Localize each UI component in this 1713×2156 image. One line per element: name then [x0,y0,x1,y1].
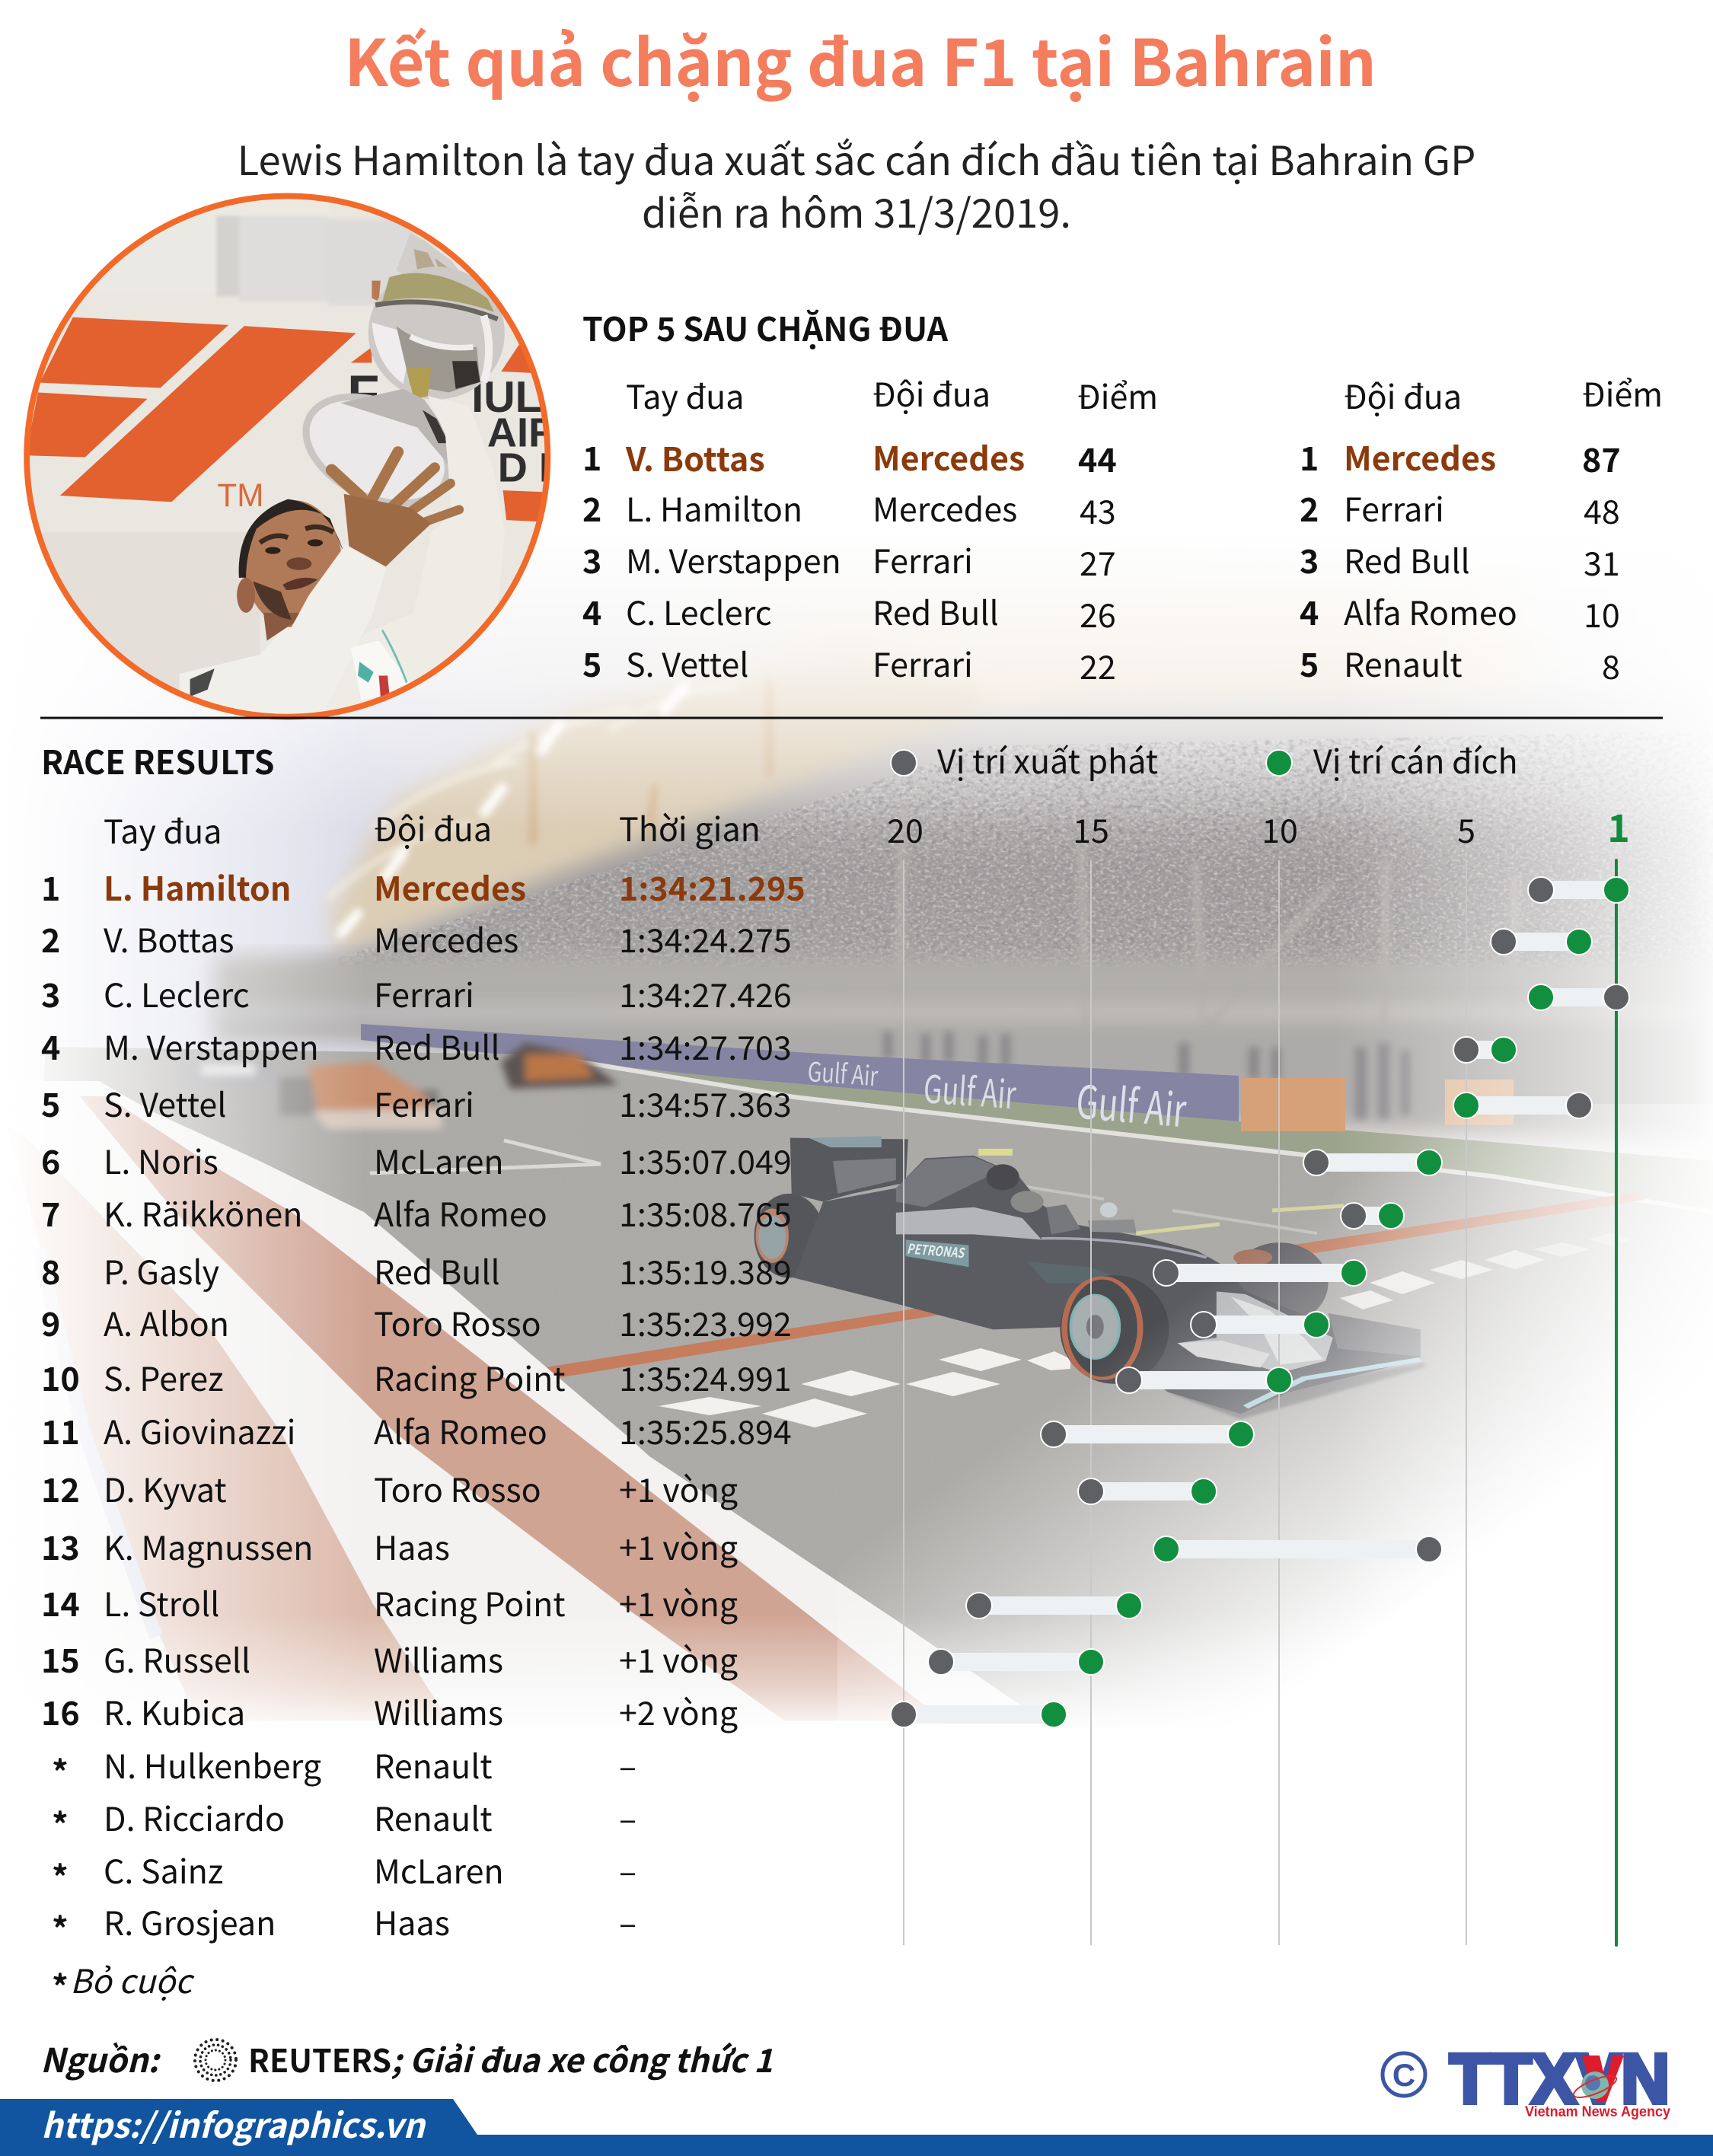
top 5 driver rows: Mercedes [872,433,1025,480]
row 6: McLaren [374,1137,504,1184]
row 2 [41,915,792,962]
S. Vettel 2 to 5 [1453,1092,1592,1118]
top 5 team rows: Ferrari [1344,484,1444,531]
L. Hamilton 3 to 1 [1528,877,1629,903]
table header: teams: Đội đua [1344,372,1462,419]
retired: Sainz: C. Sainz [104,1846,223,1893]
A. Albon 12 to 9 [1191,1312,1329,1338]
row 11: 1:35:25.894 [619,1407,792,1454]
subtitle: Lewis Hamilton là tay đua xuất sắc cán đích đầu tiên tại Bahrain GP [238,129,1475,187]
photo: Lewis Hamilton with trophy: AIR [487,410,558,456]
row 2: 2 [41,915,60,962]
row 12: D. Kyvat [104,1465,227,1512]
row 3: Ferrari [374,970,474,1017]
trophy [289,234,505,525]
row 7: Alfa Romeo [374,1189,547,1236]
row 3: 3 [41,970,60,1017]
row 4: M. Verstappen [104,1022,319,1070]
row 13 [41,1523,738,1570]
retired: Hulkenberg: Renault [374,1741,493,1788]
top 5 team rows: Red Bull [1344,536,1470,583]
title: Kết quả chặng đua F1 tại Bahrain [344,12,1376,105]
Gulf Air banner and grass: Gulf Air [806,1051,880,1095]
background photo: race track and grandstand [39,601,1713,1721]
row 15: 15 [41,1635,80,1682]
top 5 driver rows: M. Verstappen [626,536,841,583]
row 13: K. Magnussen [104,1523,313,1570]
row 16: Williams [374,1688,503,1735]
retired: Ricciardo [52,1794,636,1847]
row 4: 1:34:27.703 [619,1022,792,1070]
A. Giovinazzi 16 to 11 [1041,1421,1254,1447]
source line [40,2034,773,2082]
head [244,500,342,627]
row 15: +1 vòng [619,1635,738,1682]
chart axis: grid position scale: 5 [1457,805,1475,853]
table header: teams: Điểm [1582,369,1663,416]
section heading: race results: RACE RESULTS [41,737,275,784]
retired: Grosjean: – [619,1898,636,1945]
orange hoardings [1241,1078,1345,1131]
section heading: top 5: TOP 5 SAU CHẶNG ĐUA [582,304,948,351]
C. Leclerc 1 to 3 [1528,984,1629,1010]
row 14: 14 [41,1579,80,1626]
legend [891,736,1518,783]
top 5 driver rows: 5 [582,639,601,687]
row 5: 1:34:57.363 [619,1080,792,1127]
icon: globe [1571,2071,1619,2102]
table header: drivers: Tay đua [626,372,745,419]
row 13: 13 [41,1523,80,1570]
row 10: 1:35:24.991 [619,1354,792,1401]
source line: REUTERS [248,2036,391,2082]
retired: Sainz: – [619,1846,636,1893]
K. Räikkönen 8 to 7 [1341,1203,1404,1229]
row 7: 7 [41,1189,60,1236]
G. Russell 19 to 15 [928,1649,1104,1675]
retired: Sainz [52,1846,636,1899]
retired: Grosjean [52,1898,636,1951]
row 7: 1:35:08.765 [619,1189,792,1236]
row 9: A. Albon [104,1299,229,1346]
top 5 driver rows: 27 [1080,538,1116,585]
row 7 [41,1189,792,1236]
row 14: +1 vòng [619,1579,738,1626]
retired: Ricciardo: * [52,1800,69,1847]
TTXVN logo: Vietnam News Agency [1525,2104,1670,2120]
icon: copyright [1383,2053,1425,2096]
row 6: 6 [41,1137,60,1184]
top 5 team rows: 1 [1300,433,1319,480]
race table header: Tay đua [104,806,222,853]
row 12: +1 vòng [619,1465,738,1512]
row 14 [41,1579,738,1626]
row 5: 5 [41,1080,60,1127]
row 4 [41,1022,792,1070]
row 5 [41,1080,792,1127]
top 5 driver rows: C. Leclerc [626,588,772,635]
top 5 driver rows: 1 [582,433,601,480]
footer bar [0,2098,1713,2156]
retired: Ricciardo: D. Ricciardo [104,1794,285,1841]
top 5 team rows [1300,433,1621,689]
top 5 team rows: Mercedes [1344,433,1496,480]
top 5 driver rows: S. Vettel [626,639,748,687]
row 12: 12 [41,1465,80,1512]
table header: drivers: Điểm [1077,372,1158,419]
photo: Lewis Hamilton with trophy: TM [217,477,263,513]
R. Kubica 20 to 16 [891,1702,1067,1727]
race table header: Đội đua [374,804,492,851]
row 16: 16 [41,1688,80,1735]
race results table [41,863,805,1951]
chart axis: grid position scale [887,799,1630,1945]
table header: teams [1344,369,1663,419]
footer bar: https://infographics.vn [41,2098,426,2148]
row 1: 1 [41,863,60,911]
top 5 team rows: 48 [1584,486,1620,534]
row 10: Racing Point [374,1354,566,1401]
top 5 driver rows: Ferrari [872,536,973,583]
row 2: V. Bottas [104,915,234,962]
chart axis: grid position scale: 15 [1073,805,1109,853]
retired: Grosjean: * [52,1904,69,1951]
row 3: 1:34:27.426 [619,970,792,1017]
trackside people [883,1032,1410,1119]
Gulf Air banner and grass [361,1024,1713,1214]
photo: Lewis Hamilton with trophy [15,183,563,742]
top 5 team rows: 3 [1300,536,1319,583]
footnote: retired: Bỏ cuộc [70,1956,195,2003]
top 5 driver rows: 26 [1080,590,1116,637]
top 5 team rows: Renault [1344,639,1463,687]
top 5 driver rows: Red Bull [872,588,999,635]
row 1: Mercedes [374,863,526,911]
F1 logo [40,317,228,388]
race table header: Thời gian [619,804,761,851]
row 5: S. Vettel [104,1080,226,1127]
S. Perez 14 to 10 [1116,1367,1292,1393]
legend: Vị trí cán đích [1313,736,1518,783]
retired: Hulkenberg [52,1741,636,1794]
subtitle: diễn ra hôm 31/3/2019. [642,182,1071,240]
stadium roof [327,647,983,958]
row 4: 4 [41,1022,60,1070]
row 13: +1 vòng [619,1523,738,1570]
Gulf Air banner and grass: Gulf Air [1073,1065,1190,1140]
L. Stroll 18 to 14 [966,1593,1142,1619]
top 5 team rows: 87 [1582,435,1621,482]
row 16 [41,1688,738,1735]
row 8: Red Bull [374,1247,500,1294]
K. Magnussen 6 to 13 [1153,1536,1442,1562]
chart axis: grid position scale: 10 [1262,805,1298,853]
row 15: Williams [374,1635,503,1682]
icon: Reuters dotted sphere [195,2040,236,2081]
Mercedes F1 car [754,1136,1425,1419]
sponsor backdrop [351,347,372,362]
start line [546,1306,944,1379]
dumbbell chart: start and finish positions [891,877,1629,1727]
row 6: 1:35:07.049 [619,1137,792,1184]
row 1 [41,863,805,911]
row 9: Toro Rosso [374,1299,541,1346]
top 5 driver rows: L. Hamilton [626,484,802,531]
retired: Hulkenberg: * [52,1747,69,1794]
row 2: 1:34:24.275 [619,915,792,962]
white race suit [309,396,505,718]
top 5 driver rows: 43 [1080,486,1116,534]
backdrop panels [96,199,419,305]
retired: Hulkenberg: N. Hulkenberg [104,1741,321,1788]
TTXVN logo: TTXVN [1450,2040,1670,2118]
photo: Lewis Hamilton with trophy: D I [498,445,550,491]
row 11: 11 [41,1407,80,1454]
top 5 driver rows [582,433,1117,689]
row 10: S. Perez [104,1354,224,1401]
row 14: L. Stroll [104,1579,219,1626]
row 10 [41,1354,792,1401]
photo: Lewis Hamilton with trophy: IUL [471,373,542,422]
row 13: Haas [374,1523,450,1570]
table header: drivers: Đội đua [872,369,990,416]
row 14: Racing Point [374,1579,566,1626]
retired: Ricciardo: – [619,1794,636,1841]
V. Bottas 4 to 2 [1491,929,1592,955]
row 4: Red Bull [374,1022,500,1070]
row 16: R. Kubica [104,1688,245,1735]
row 5: Ferrari [374,1080,474,1127]
top 5 driver rows: Ferrari [872,639,973,687]
row 6: L. Noris [104,1137,219,1184]
top 5 driver rows: 44 [1078,435,1117,482]
source line: ; Giải đua xe công thức 1 [391,2036,773,2082]
M. Verstappen 5 to 4 [1453,1037,1517,1063]
row 8: 8 [41,1247,60,1294]
retired: Sainz: * [52,1852,69,1899]
top 5 team rows: 2 [1300,484,1319,531]
top 5 team rows: 8 [1602,642,1620,689]
white fade masks [0,525,1713,830]
Mercedes F1 car: PETRONAS [906,1238,968,1262]
L. Noris 9 to 6 [1303,1150,1442,1175]
top 5 driver rows: V. Bottas [625,434,765,481]
photo: Lewis Hamilton with trophy: F [347,365,379,423]
top 5 team rows: 31 [1584,538,1620,585]
row 1: 1:34:21.295 [619,863,805,911]
top 5 driver rows: 22 [1080,642,1116,689]
chart axis: grid position scale: 1 [1607,799,1630,853]
hand [332,452,459,527]
P. Gasly 13 to 8 [1153,1260,1367,1286]
table: top 5 drivers [582,369,1158,689]
top 5 team rows: Alfa Romeo [1344,588,1517,635]
row 10: 10 [41,1354,80,1401]
retired: Ricciardo: Renault [374,1794,493,1841]
row 7: K. Räikkönen [104,1189,302,1236]
table: top 5 teams [1300,369,1663,689]
row 15 [41,1635,738,1682]
row 1: L. Hamilton [104,863,291,911]
Gulf Air banner and grass: Gulf Air [922,1057,1019,1120]
table header: drivers [626,369,1158,419]
race table header [104,804,761,853]
track kerbs [0,1081,1043,1781]
top 5 driver rows: Mercedes [872,484,1017,531]
D. Kyvat 15 to 12 [1078,1478,1217,1504]
legend: Vị trí xuất phát [937,736,1158,783]
distant cars [182,1043,619,1129]
subtitle [238,129,1475,240]
top 5 team rows: 10 [1584,590,1620,637]
source line: Nguồn: [40,2034,161,2082]
row 11 [41,1407,792,1454]
row 12: Toro Rosso [374,1465,541,1512]
row 9: 9 [41,1299,60,1346]
retired: Hulkenberg: – [619,1741,636,1788]
top 5 driver rows: 4 [582,588,601,635]
icon: copyright: C [1392,2057,1415,2093]
footnote: retired: * [52,1962,69,2009]
row 16: +2 vòng [619,1688,738,1735]
row 11: A. Giovinazzi [104,1407,295,1454]
top 5 team rows: 5 [1300,639,1319,687]
row 12 [41,1465,738,1512]
row 8: P. Gasly [104,1247,219,1294]
row 8 [41,1247,792,1294]
row 8: 1:35:19.389 [619,1247,792,1294]
asphalt track [0,1047,1713,1751]
row 2: Mercedes [374,915,518,962]
top 5 team rows: 4 [1300,588,1319,635]
row 3: C. Leclerc [104,970,250,1017]
retired: Grosjean: R. Grosjean [104,1898,276,1945]
checkered start grid [659,1233,1633,1427]
grandstand crowd [244,678,1713,990]
row 9 [41,1299,792,1346]
top 5 driver rows: 3 [582,536,601,583]
row 6 [41,1137,792,1184]
chart axis: grid position scale: 20 [887,805,923,853]
top 5 driver rows: 2 [582,484,601,531]
retired: Grosjean: Haas [374,1898,450,1945]
row 15: G. Russell [104,1635,250,1682]
sleeve over chin [288,544,386,672]
row 3 [41,970,792,1017]
row 11: Alfa Romeo [374,1407,547,1454]
retired: Sainz: McLaren [374,1846,504,1893]
row 9: 1:35:23.992 [619,1299,792,1346]
